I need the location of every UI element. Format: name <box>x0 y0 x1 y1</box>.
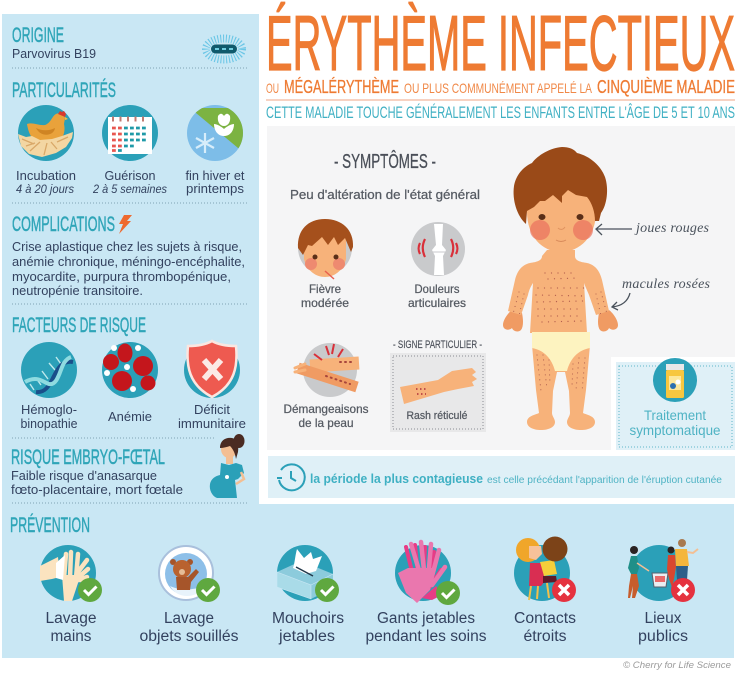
section: facteurs de risque: Déficit <box>194 402 230 417</box>
section: particularités: fin hiver et <box>186 168 245 183</box>
panel: période contagieuse: la période la plus contagieuse <box>310 472 483 486</box>
left panel <box>2 14 259 506</box>
heading: symptômes: - SYMPTÔMES - <box>334 150 436 173</box>
section: origine: Parvovirus B19 <box>12 46 96 61</box>
section: complications: anémie chronique, méningo-encéphalite, <box>12 254 245 269</box>
label: joues rouges <box>596 221 710 236</box>
label: joues rouges: joues rouges <box>634 221 710 236</box>
icon: check <box>315 578 339 602</box>
section: particularités <box>12 79 250 196</box>
subheading: Peu d'altération de l'état général <box>290 187 480 202</box>
section: complications: neutropénie transitoire. <box>12 283 143 298</box>
bottom panel: prévention: étroits <box>524 628 567 645</box>
icon: public places <box>628 539 698 602</box>
label: macules rosées <box>612 277 711 310</box>
section: particularités: Incubation <box>16 168 76 183</box>
icon: cross <box>552 578 576 602</box>
bottom panel: prévention: objets souillés <box>140 628 239 645</box>
section: risque embryo-fœtal <box>11 434 244 498</box>
head <box>514 147 607 252</box>
bottom panel: prévention: Gants jetables <box>377 610 475 627</box>
icon: check <box>78 578 102 602</box>
subtitle: OU <box>266 80 279 96</box>
icon: gloves <box>395 542 460 605</box>
subtitle: OU PLUS COMMUNÉMENT APPELÉ LA <box>404 80 592 96</box>
icon: shield <box>184 341 240 398</box>
icon: virus <box>206 38 242 60</box>
icon: pill bottle <box>653 358 697 402</box>
label: macules rosées: macules rosées <box>622 277 711 292</box>
icon: dna <box>21 342 77 398</box>
section: facteurs de risque: immunitaire <box>178 416 246 431</box>
icon: clock <box>277 464 305 490</box>
bottom panel: prévention: mains <box>50 628 92 645</box>
section: origine <box>12 24 242 61</box>
icon: itching <box>295 343 359 397</box>
panel: période contagieuse <box>268 456 735 498</box>
icon: calendar <box>102 105 158 161</box>
icon: pregnant woman <box>210 434 244 498</box>
callout: signe particulier <box>390 339 486 432</box>
panel: traitement: symptomatique <box>630 422 721 438</box>
icon: check <box>196 578 220 602</box>
bottom panel: prévention: jetables <box>278 628 335 645</box>
panel: symptômes: Démangeaisons <box>284 402 368 416</box>
callout: signe particulier: - SIGNE PARTICULIER - <box>393 339 482 351</box>
rash dots <box>536 273 584 322</box>
bottom panel: prévention: Lavage <box>164 610 214 627</box>
section: risque embryo-fœtal: RISQUE EMBRYO-FŒTAL <box>11 446 165 469</box>
panel: symptômes: modérée <box>301 296 349 310</box>
section: origine: ORIGINE <box>12 24 64 47</box>
section: particularités: 2 à 5 semaines <box>92 182 167 196</box>
section: facteurs de risque <box>12 314 246 431</box>
illustration: child <box>503 147 618 430</box>
bottom panel: prévention: publics <box>638 628 688 645</box>
panel: traitement <box>611 357 736 450</box>
icon: children hugging <box>514 536 576 602</box>
bottom panel: prévention: pendant les soins <box>366 628 487 645</box>
section: complications: COMPLICATIONS <box>12 213 115 236</box>
bottom panel: prévention <box>2 504 734 658</box>
icon: check <box>436 581 460 605</box>
bottom panel: prévention: Lieux <box>644 610 682 627</box>
panel: symptômes: articulaires <box>408 296 466 310</box>
subtitle: MÉGALÉRYTHÈME <box>284 77 399 97</box>
section: risque embryo-fœtal: fœto-placentaire, mort fœtale <box>11 482 183 497</box>
panel: période contagieuse: est celle précédant l'apparition de l'éruption cutanée <box>487 475 722 486</box>
section: facteurs de risque: FACTEURS DE RISQUE <box>12 314 146 337</box>
section: particularités: PARTICULARITÉS <box>12 79 116 102</box>
panel: symptômes: Fièvre <box>309 282 341 296</box>
panel: symptômes: Douleurs <box>414 282 460 296</box>
section: complications: Crise aplastique chez les sujets à risque, <box>12 239 242 254</box>
section: particularités: Guérison <box>104 168 156 183</box>
section: risque embryo-fœtal: Faible risque d'anasarque <box>11 468 157 483</box>
icon: joint pain <box>411 222 465 276</box>
heading: prévention: PRÉVENTION <box>10 514 90 537</box>
panel: traitement: Traitement <box>644 407 706 423</box>
icon: fever <box>298 219 353 279</box>
section: facteurs de risque: Anémie <box>108 409 152 424</box>
callout: signe particulier: Rash réticulé <box>406 410 468 422</box>
section: complications: myocardite, purpura thrombopénique, <box>12 269 231 284</box>
icon: rash arm <box>400 368 477 404</box>
icon: hen <box>18 105 74 161</box>
icon: anemia <box>102 342 158 398</box>
copyright: © Cherry for Life Science <box>623 660 731 670</box>
section: facteurs de risque: Hémoglo- <box>21 402 77 417</box>
icon: tissue box <box>277 545 339 602</box>
panel: symptômes <box>267 126 735 450</box>
icon: lightning <box>119 215 132 234</box>
bottom panel: prévention: Mouchoirs <box>272 610 344 627</box>
section: facteurs de risque: binopathie <box>20 416 78 431</box>
section: particularités: 4 à 20 jours <box>16 182 74 196</box>
subtitle <box>266 77 735 97</box>
icon: cross <box>671 578 695 602</box>
icon: washing hands <box>40 545 102 602</box>
section: particularités: printemps <box>186 181 245 196</box>
panel: symptômes: de la peau <box>298 416 354 430</box>
bottom panel: prévention: Lavage <box>46 610 96 627</box>
icon: season <box>187 105 243 161</box>
bottom panel: prévention: Contacts <box>514 610 576 627</box>
icon: teddy bear in washer <box>159 546 220 602</box>
section: complications <box>12 213 245 298</box>
body <box>503 250 618 430</box>
